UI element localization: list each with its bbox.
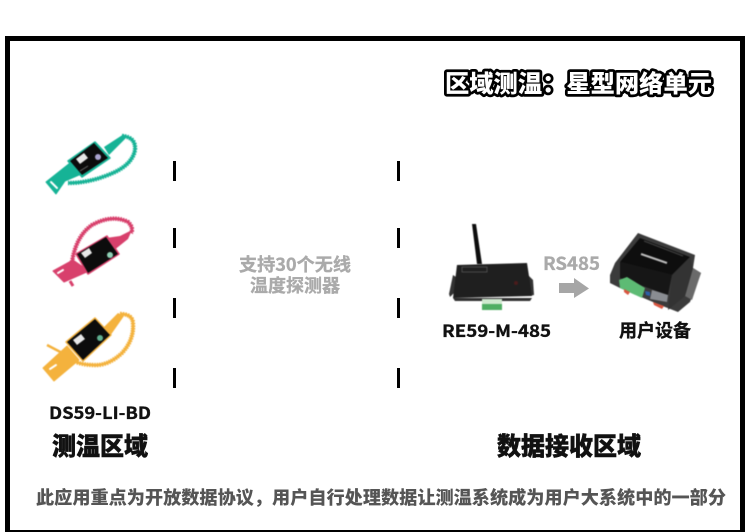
title: 区域测温：星型网络单元 bbox=[445, 64, 712, 99]
icon: RE59 wireless receiver bbox=[449, 224, 534, 310]
divider: right dashed line bbox=[397, 161, 400, 388]
label: receiver model: RE59-M-485 bbox=[442, 317, 551, 342]
panel: sensing devices bbox=[43, 134, 135, 381]
icon: user equipment controller bbox=[610, 233, 701, 312]
icon: yellow wristband sensor bbox=[43, 313, 133, 381]
arrow: receiver to user equipment bbox=[559, 278, 589, 298]
icon: teal wristband sensor bbox=[46, 134, 135, 194]
heading: data receiving zone: 数据接收区域 bbox=[497, 427, 641, 463]
icon: pink wristband sensor bbox=[53, 219, 132, 286]
text: supports 30 wireless sensors: 温度探测器 bbox=[250, 272, 340, 298]
text: supports 30 wireless sensors bbox=[239, 251, 351, 298]
text: supports 30 wireless sensors: 支持30个无线 bbox=[239, 251, 351, 277]
label: RS485: RS485 bbox=[543, 250, 600, 276]
footer note: 此应用重点为开放数据协议，用户自行处理数据让测温系统成为用户大系统中的一部分 bbox=[36, 484, 726, 510]
heading: sensing zone: 测温区域 bbox=[52, 427, 148, 463]
label: sensor model: DS59-LI-BD bbox=[49, 399, 151, 424]
label: user equipment: 用户设备 bbox=[619, 317, 691, 343]
divider: left dashed line bbox=[173, 161, 176, 388]
